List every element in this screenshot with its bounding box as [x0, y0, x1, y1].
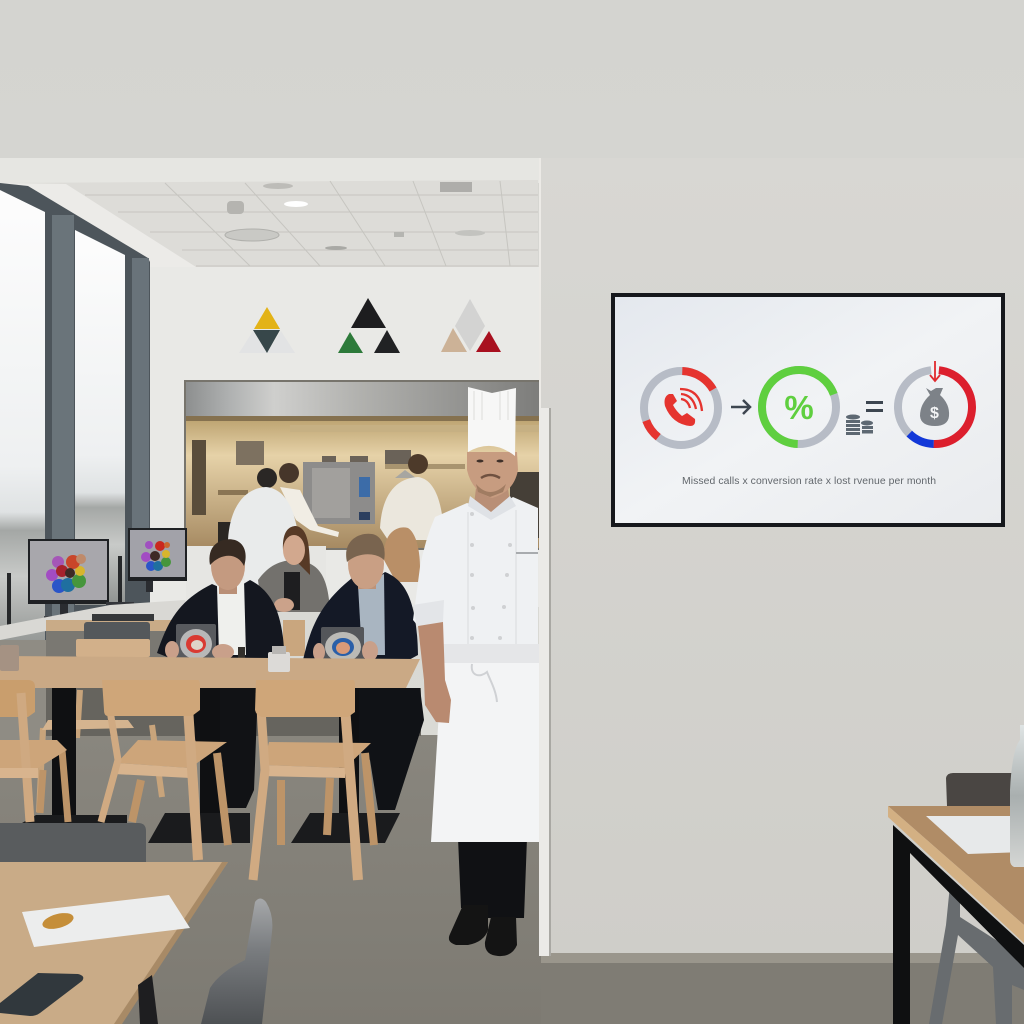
tablet left — [176, 624, 216, 663]
oven — [303, 462, 375, 524]
person: man right — [303, 534, 424, 810]
table: main — [0, 645, 420, 843]
icon: money bag — [920, 388, 949, 426]
trousers — [458, 838, 527, 918]
face — [467, 452, 518, 498]
cookie — [41, 910, 75, 932]
water bottle — [1010, 725, 1024, 867]
monitor: right — [106, 528, 187, 605]
chair: middle right — [253, 680, 374, 880]
arm and hand — [418, 622, 451, 723]
phone — [0, 973, 83, 1016]
chart blob — [46, 554, 86, 593]
icon: money bag: $ — [930, 405, 939, 422]
condiments — [268, 646, 290, 672]
panel: floor — [0, 735, 1024, 1024]
percent sign: % — [784, 389, 814, 426]
ring: missed calls — [629, 356, 733, 460]
person: kitchen staff right — [380, 454, 443, 540]
arrow — [731, 400, 750, 414]
panel: back wall — [149, 267, 539, 607]
foreground grey chair back — [0, 823, 146, 862]
TV screen — [615, 297, 1001, 523]
formula caption: Missed calls x conversion rate x lost rvenue per month — [682, 476, 936, 487]
person: chef — [413, 387, 539, 956]
chair: middle left — [101, 680, 228, 860]
document — [926, 816, 1024, 854]
collar — [468, 496, 516, 520]
icon: down arrow — [930, 361, 940, 381]
right chair — [929, 773, 1024, 1024]
panel: windows — [0, 183, 150, 650]
ring: lost revenue — [883, 355, 987, 459]
ring: conversion rate — [761, 369, 837, 445]
person: man left — [157, 539, 284, 808]
neck — [474, 488, 510, 513]
tablet right — [321, 627, 364, 666]
person: kitchen staff reaching — [279, 463, 339, 537]
person: blonde woman — [384, 527, 420, 582]
jacket — [413, 497, 538, 650]
wall corner strip — [539, 158, 551, 956]
wall art: triangles — [239, 298, 501, 353]
table: right — [888, 725, 1024, 1024]
wall display — [611, 293, 1005, 527]
table: foreground — [0, 862, 228, 1024]
monitor: left — [0, 539, 109, 634]
document — [22, 895, 190, 947]
icon: coins — [846, 414, 873, 435]
shoes — [449, 905, 517, 956]
chair: far left — [0, 680, 68, 822]
chair: behind table — [39, 620, 305, 812]
equals sign — [866, 401, 883, 412]
person: kitchen staff back — [228, 468, 300, 590]
apron — [431, 645, 539, 842]
foreground grey chair — [201, 898, 272, 1024]
chart blob — [141, 541, 171, 571]
back desk — [0, 600, 190, 657]
hat — [468, 387, 516, 456]
person: woman behind table — [258, 526, 330, 612]
panel: right wall — [540, 158, 1024, 958]
icon: phone with signal waves — [664, 389, 702, 426]
panel: open kitchen — [184, 380, 539, 606]
TV frame — [611, 293, 1005, 527]
lower wall behind tables — [0, 631, 421, 750]
panel: ceiling — [0, 158, 540, 267]
